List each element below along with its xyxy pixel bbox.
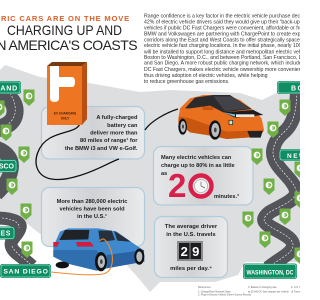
station label: EV CHARGING <box>54 112 77 116</box>
sign: San Diego: SAN DIEGO <box>3 268 49 276</box>
icon: plus <box>50 66 75 102</box>
intro paragraph: to reduce greenhouse gas emissions. <box>144 79 229 85</box>
station label: ONLY <box>61 116 70 120</box>
charging station <box>47 62 87 125</box>
miles per day text: in the U.S. travels <box>166 232 216 238</box>
footnotes: at 50 kW DC fast charger per vehicle <box>248 290 289 294</box>
orange charging cable <box>51 239 112 275</box>
panel: charge time <box>154 146 253 205</box>
footnotes: 2. Plug-In Electric Vehicle Driver Survey Results <box>198 294 252 296</box>
battery range text: battery can <box>107 123 138 129</box>
station label <box>54 112 77 120</box>
EVs sold text: in the U.S.¹ <box>77 213 107 220</box>
sign: Washington DC <box>243 264 297 279</box>
charging location pins <box>0 90 306 264</box>
rear wheel <box>178 119 187 135</box>
west coast road <box>0 93 32 266</box>
charge time text: Many electric vehicles can <box>161 155 232 161</box>
footnotes: References <box>198 286 212 289</box>
battery range text: 80 miles of range¹ for <box>80 137 138 144</box>
sign: San Diego <box>0 264 51 278</box>
miles per day text: The average driver <box>165 224 218 230</box>
battery range text: A fully-charged <box>96 115 138 121</box>
east coast road <box>264 92 297 268</box>
battery range text <box>65 115 138 152</box>
footnotes: 1. ChargePoint Network Data <box>198 290 231 294</box>
flip counter 29: 2 <box>181 244 188 259</box>
charge time text: as <box>161 171 167 177</box>
footnotes: 3. Based on charging rate <box>248 286 277 289</box>
sign: Los Angeles <box>0 226 15 240</box>
panel: miles per day <box>154 216 228 278</box>
intro paragraph <box>144 14 320 85</box>
title <box>0 14 137 53</box>
EVs sold text: vehicles have been sold <box>59 206 125 212</box>
front wheel <box>209 120 221 140</box>
intro paragraph: and San Diego. A more robust public charging network, which includes <box>144 61 300 67</box>
US map background <box>0 65 300 292</box>
sign: Boston <box>277 81 320 94</box>
intro paragraph: thus driving adoption of electric vehicles, while helping <box>144 73 268 79</box>
miles per day text: miles per day.⁴ <box>170 266 212 272</box>
rear wheel <box>95 252 107 271</box>
panel: battery range <box>42 106 144 159</box>
sign: San Francisco <box>0 160 17 172</box>
front wheel <box>134 249 144 265</box>
intro paragraph: corridors along the East and West Coasts to offer strategically spaced, <box>144 37 300 43</box>
charge time text: charge up to 80% in as little <box>161 163 235 169</box>
intro paragraph: DC Fast Chargers, makes electric vehicle ownership more convenient, <box>144 67 300 73</box>
charge time text: minutes.³ <box>214 193 239 200</box>
miles per day text <box>165 224 218 272</box>
footnotes <box>198 286 305 296</box>
charging cable black <box>36 109 178 180</box>
panel: EVs sold <box>42 188 144 246</box>
flip counter 29: 9 <box>192 244 199 259</box>
charge time text <box>161 155 239 200</box>
big number 20 with clock: 2 <box>168 167 186 204</box>
EVs sold text <box>57 199 127 220</box>
title line 2: CHARGING UP AND <box>7 22 122 38</box>
blue VW e-Golf <box>53 228 144 271</box>
sign: New York <box>279 149 320 161</box>
orange BMW i3 <box>178 95 264 140</box>
EVs sold text: More than 280,000 electric <box>57 199 127 205</box>
sign: Portland <box>0 81 21 94</box>
battery range text: deliver more than <box>90 130 138 136</box>
battery range text: the BMW i3 and VW e-Golf. <box>65 146 138 152</box>
flip counter 29 <box>177 241 203 261</box>
